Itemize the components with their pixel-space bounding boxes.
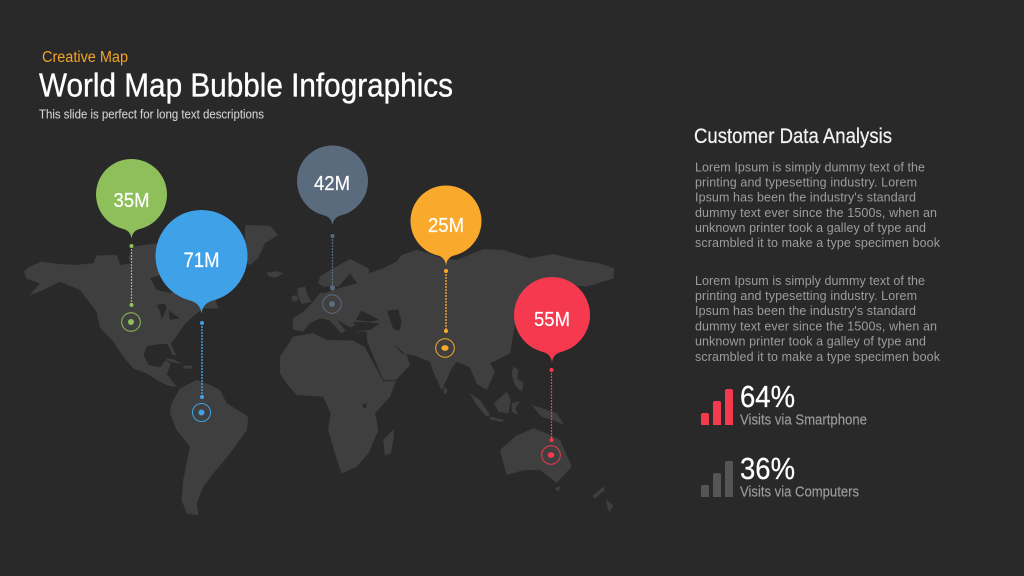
Africa: [280, 333, 396, 473]
Sumatra and Java: [470, 393, 503, 422]
bubble: [411, 185, 481, 266]
paragraph 2: scrambled it to make a type specimen book: [695, 350, 941, 364]
Black Sea and inland water cutouts: [356, 311, 379, 409]
value: 42M: [314, 173, 350, 195]
paragraph 2: [695, 274, 941, 364]
Madagascar: [383, 429, 394, 455]
marker: 55M Australia: [514, 277, 590, 464]
paragraph 1: [695, 160, 941, 250]
panel heading: Customer Data Analysis: [694, 125, 892, 148]
panel: customer data analysis: [694, 125, 941, 364]
pin line: [444, 269, 448, 333]
paragraph 1: dummy text ever since the 1500s, when an: [695, 206, 937, 220]
value: 35M: [114, 190, 150, 212]
location ring: [192, 404, 210, 422]
value: 71M: [184, 249, 220, 272]
caption: Visits via Smartphone: [740, 412, 867, 428]
title: World Map Bubble Infographics: [39, 66, 453, 104]
value: 25M: [428, 215, 464, 237]
paragraph 2: unknown printer took a galley of type and: [695, 334, 926, 348]
location ring: [542, 446, 560, 464]
Iceland: [267, 271, 283, 278]
Sri Lanka: [444, 387, 447, 394]
paragraph 1: unknown printer took a galley of type and: [695, 221, 926, 235]
pin line: [130, 244, 134, 307]
percentage: 36%: [740, 451, 795, 486]
South America: [170, 380, 248, 515]
marker: 71M South America: [156, 210, 248, 422]
value: 55M: [534, 308, 570, 331]
stat: computer visits: [701, 451, 859, 500]
pin line: [550, 368, 554, 442]
Caribbean islands: [165, 358, 193, 369]
paragraph 1: Ipsum has been the industry's standard: [695, 190, 916, 204]
paragraph 2: dummy text ever since the 1500s, when an: [695, 320, 937, 334]
marker: 42M Europe: [297, 145, 368, 313]
bubble: [514, 277, 590, 362]
bubble: [96, 159, 167, 238]
world map: [24, 225, 614, 515]
paragraph 1: printing and typesetting industry. Lorem: [695, 176, 917, 190]
Borneo: [494, 392, 511, 413]
paragraph 2: Lorem Ipsum is simply dummy text of the: [695, 274, 925, 288]
Australia: [500, 428, 572, 483]
New Zealand: [593, 487, 613, 512]
paragraph 1: Lorem Ipsum is simply dummy text of the: [695, 160, 925, 174]
New Guinea: [532, 405, 564, 425]
marker: 25M Asia: [411, 185, 481, 357]
Eurasia: [293, 249, 614, 390]
location ring: [436, 339, 454, 357]
Sulawesi and Philippines: [512, 367, 523, 415]
icon: grey signal bars: [701, 461, 733, 497]
stat: smartphone visits: [701, 379, 867, 428]
eyebrow: Creative Map: [42, 49, 128, 66]
pin line: [200, 321, 204, 399]
paragraph 2: Ipsum has been the industry's standard: [695, 304, 916, 318]
bubble: [297, 145, 368, 226]
pin line: [330, 234, 335, 290]
icon: red signal bars: [701, 389, 733, 425]
caption: Visits via Computers: [740, 484, 859, 500]
marker: 35M North America: [96, 159, 167, 331]
bubble: [156, 210, 248, 314]
percentage: 64%: [740, 379, 795, 414]
Greenland: [245, 225, 278, 265]
location ring: [122, 313, 140, 331]
subtitle: This slide is perfect for long text descriptions: [39, 108, 264, 122]
Arctic Canada islands: [128, 243, 160, 265]
British Isles: [292, 287, 312, 304]
paragraph 2: printing and typesetting industry. Lorem: [695, 289, 917, 303]
paragraph 1: scrambled it to make a type specimen book: [695, 236, 941, 250]
location ring: [323, 295, 341, 313]
North America: [24, 250, 220, 387]
